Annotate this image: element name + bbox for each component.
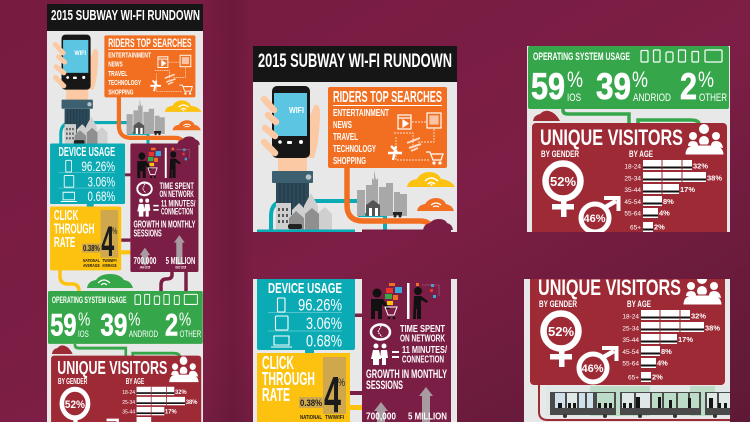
unique visitors: 46%: [581, 363, 604, 375]
operating system usage: 59: [531, 66, 565, 107]
top section: search panel and city: ENTERTAINMENT: [108, 51, 151, 60]
top section: search panel and city: SHOPPING: [108, 87, 133, 96]
middle section: device usage, click through rate, network stats: JAN 2015: [140, 266, 150, 270]
unique visitors: 52%: [548, 324, 574, 339]
lower section: operating systems and unique visitors: 39: [100, 308, 127, 343]
middle section: device usage, click through rate, network stats: TWIWIFI: [102, 258, 117, 263]
unique visitors text: 17%: [680, 185, 695, 194]
middle section: device usage, click through rate, network stats: AVERAGE: [102, 263, 117, 268]
unique visitors text: BY AGE: [629, 149, 653, 160]
operating system usage: [528, 46, 729, 109]
middle section: device usage, click through rate, network stats: 5 MILLION: [166, 256, 196, 266]
device usage: DEVICE USAGE: [268, 280, 342, 297]
unique visitors text: 25-34: [624, 176, 641, 182]
top section: search panel and city: TECHNOLOGY: [108, 78, 141, 87]
click through rate: THROUGH: [262, 369, 315, 389]
unique visitors text: 46%: [583, 213, 606, 225]
operating system usage: %: [698, 67, 714, 92]
lower section: operating systems and unique visitors: %: [179, 309, 191, 330]
callout: riders top searches: TRAVEL: [333, 132, 358, 143]
click through rate: %: [338, 377, 345, 389]
unique visitors text: UNIQUE VISITORS: [540, 125, 683, 150]
callout: riders top searches: SHOPPING: [333, 156, 366, 167]
middle section: device usage, click through rate, network stats: RATE: [54, 234, 76, 251]
callout: riders top searches: TECHNOLOGY: [333, 144, 376, 155]
illustration: subway train: [539, 385, 730, 420]
lower section: operating systems and unique visitors: 35-44: [122, 409, 135, 416]
middle section: device usage, click through rate, network stats: DEVICE USAGE: [58, 145, 115, 159]
network stats: 11 MINUTES/: [402, 344, 447, 356]
unique visitors: BY AGE: [627, 299, 651, 310]
top section: search panel and city: [55, 35, 202, 146]
panel: full infographic column: [47, 4, 203, 422]
network stats: CONNECTION: [402, 354, 444, 366]
click through rate: CLICK: [262, 353, 294, 373]
illustration: hand, phone and city: [264, 86, 455, 232]
click through rate: NATIONAL: [300, 415, 322, 421]
unique visitors: 17%: [678, 335, 693, 344]
click through rate: RATE: [262, 385, 290, 405]
panel: visitors and train detail: [524, 279, 730, 422]
unique visitors text: 35-44: [624, 187, 641, 194]
top section: search panel and city: TRAVEL: [108, 69, 128, 78]
header: detail: [253, 46, 457, 82]
lower section: operating systems and unique visitors: ANDRIOD: [129, 329, 158, 339]
lower section: operating systems and unique visitors: 52%: [65, 399, 86, 411]
lower section: operating systems and unique visitors: 38%: [186, 400, 198, 406]
lower section: operating systems and unique visitors: 17%: [165, 409, 177, 416]
middle section: device usage, click through rate, network stats: [50, 144, 198, 272]
callout: riders top searches: NEWS: [333, 120, 352, 131]
callout: riders top searches: RIDERS TOP SEARCHES: [333, 89, 442, 106]
operating system usage: IOS: [567, 92, 581, 104]
click through rate: 0.38%: [300, 398, 322, 409]
connectors between sections: [60, 270, 186, 291]
middle section: device usage, click through rate, network stats: AVERAGE: [83, 263, 100, 268]
lower section: operating systems and unique visitors: 18-24: [122, 390, 135, 396]
lower section: operating systems and unique visitors: IOS: [78, 329, 89, 339]
unique visitors: 65+: [628, 374, 639, 382]
lower section: operating systems and unique visitors: [48, 291, 203, 422]
middle section: device usage, click through rate, network stats: SESSIONS: [133, 228, 162, 239]
middle section: device usage, click through rate, network stats: CONNECTION: [161, 206, 193, 217]
callout: riders top searches: ENTERTAINMENT: [333, 108, 389, 119]
phone screen label: WIFI: [289, 106, 304, 115]
middle section: device usage, click through rate, network stats: THROUGH: [54, 221, 94, 238]
middle section: device usage, click through rate, network stats: ON NETWORK: [159, 188, 194, 199]
lower section: operating systems and unique visitors: %: [128, 309, 141, 330]
lower section: operating systems and unique visitors: 59: [50, 308, 76, 343]
unique visitors text: 52%: [550, 174, 576, 189]
panel: device usage detail: [253, 270, 457, 422]
unique visitors text: [540, 125, 722, 232]
middle section: device usage, click through rate, network stats: 11 MINUTES/: [161, 198, 196, 209]
top section: search panel and city: NEWS: [108, 60, 123, 69]
middle section: device usage, click through rate, network stats: 0.38%: [83, 244, 100, 253]
middle section: device usage, click through rate, network stats: %: [112, 226, 117, 236]
click through rate: TWIWIFI: [325, 415, 344, 421]
unique visitors: UNIQUE VISITORS: [538, 275, 681, 300]
operating system usage: 39: [596, 66, 631, 107]
lower section: operating systems and unique visitors: 2: [165, 308, 178, 343]
unique visitors: BY GENDER: [539, 299, 577, 310]
top section: search panel and city: WIFI: [75, 50, 86, 57]
unique visitors: [530, 279, 725, 385]
header: detail: 2015 SUBWAY WI-FI RUNDOWN: [258, 50, 452, 72]
lower section: operating systems and unique visitors: 32%: [175, 390, 187, 396]
callout: riders top searches: [328, 87, 447, 168]
middle section: device usage, click through rate, network stats: NATIONAL: [83, 258, 100, 263]
unique visitors text: 4%: [659, 208, 670, 218]
unique visitors text: 38%: [707, 174, 722, 182]
operating system usage: %: [632, 67, 648, 92]
lower section: operating systems and unique visitors: %: [78, 309, 91, 330]
middle section: device usage, click through rate, network stats: 700,000: [133, 256, 156, 266]
top section: search panel and city: RIDERS TOP SEARCHES: [108, 36, 192, 50]
lower section: operating systems and unique visitors: BY AGE: [126, 377, 144, 386]
unique visitors text: 32%: [693, 162, 708, 170]
unique visitors: 8%: [661, 347, 672, 356]
middle section: device usage, click through rate, network stats: DEC 2015: [176, 266, 186, 270]
lower section: operating systems and unique visitors: 25-34: [122, 400, 135, 406]
unique visitors: 38%: [705, 324, 720, 332]
panel: operating systems and visitors detail: [527, 46, 730, 235]
unique visitors: 18-24: [622, 314, 639, 320]
panel: title and top searches detail: [253, 46, 457, 232]
click through rate: [257, 353, 350, 422]
lower section: operating systems and unique visitors: OTHER: [180, 329, 201, 339]
unique visitors text: 8%: [663, 197, 674, 206]
unique visitors text: 55-64: [624, 210, 641, 218]
device usage: 0.68%: [306, 333, 342, 351]
middle section: device usage, click through rate, network stats: GROWTH IN MONTHLY: [133, 219, 195, 230]
device usage: 96.26%: [298, 296, 342, 314]
middle section: device usage, click through rate, network stats: TIME SPENT: [159, 181, 194, 191]
operating system usage: OTHER: [699, 92, 727, 104]
unique visitors: 45-54: [622, 349, 639, 356]
header: full column: 2015 SUBWAY WI-FI RUNDOWN: [51, 8, 200, 24]
network stats: SESSIONS: [366, 380, 403, 392]
unique visitors: 4%: [657, 358, 668, 368]
unique visitors: 55-64: [622, 360, 639, 368]
unique visitors text: BY GENDER: [541, 149, 579, 160]
operating system usage: 2: [680, 66, 697, 107]
unique visitors text: 18-24: [624, 164, 641, 170]
operating system usage: %: [567, 67, 583, 92]
middle section: device usage, click through rate, network stats: 0.68%: [88, 189, 115, 204]
unique visitors: 2%: [652, 372, 663, 382]
header: full column: [47, 4, 203, 31]
middle section: device usage, click through rate, network stats: 96.26%: [81, 158, 115, 174]
unique visitors: 25-34: [622, 326, 639, 332]
unique visitors text: 45-54: [624, 199, 641, 206]
device usage: 3.06%: [306, 315, 342, 333]
operating system usage: ANDRIOD: [633, 92, 671, 104]
middle section: device usage, click through rate, network stats: 4: [101, 217, 114, 265]
lower section: operating systems and unique visitors: OPERATING SYSTEM USAGE: [52, 294, 127, 305]
network stats: [362, 270, 451, 422]
network stats: GROWTH IN MONTHLY: [366, 369, 447, 381]
device usage: [257, 279, 355, 353]
middle section: device usage, click through rate, network stats: CLICK: [54, 207, 79, 224]
lower section: operating systems and unique visitors: UNIQUE VISITORS: [57, 357, 167, 378]
unique visitors text: 2%: [654, 222, 665, 232]
unique visitors text: 65+: [630, 224, 641, 232]
unique visitors: 35-44: [622, 337, 639, 344]
click through rate: 4: [324, 366, 341, 422]
unique visitors: 32%: [691, 312, 706, 320]
network stats: TIME SPENT: [400, 323, 445, 335]
middle section: device usage, click through rate, network stats: 3.06%: [88, 174, 115, 189]
operating system usage: OPERATING SYSTEM USAGE: [533, 51, 630, 63]
lower section: operating systems and unique visitors: BY GENDER: [58, 377, 88, 386]
network stats: ON NETWORK: [400, 332, 445, 344]
